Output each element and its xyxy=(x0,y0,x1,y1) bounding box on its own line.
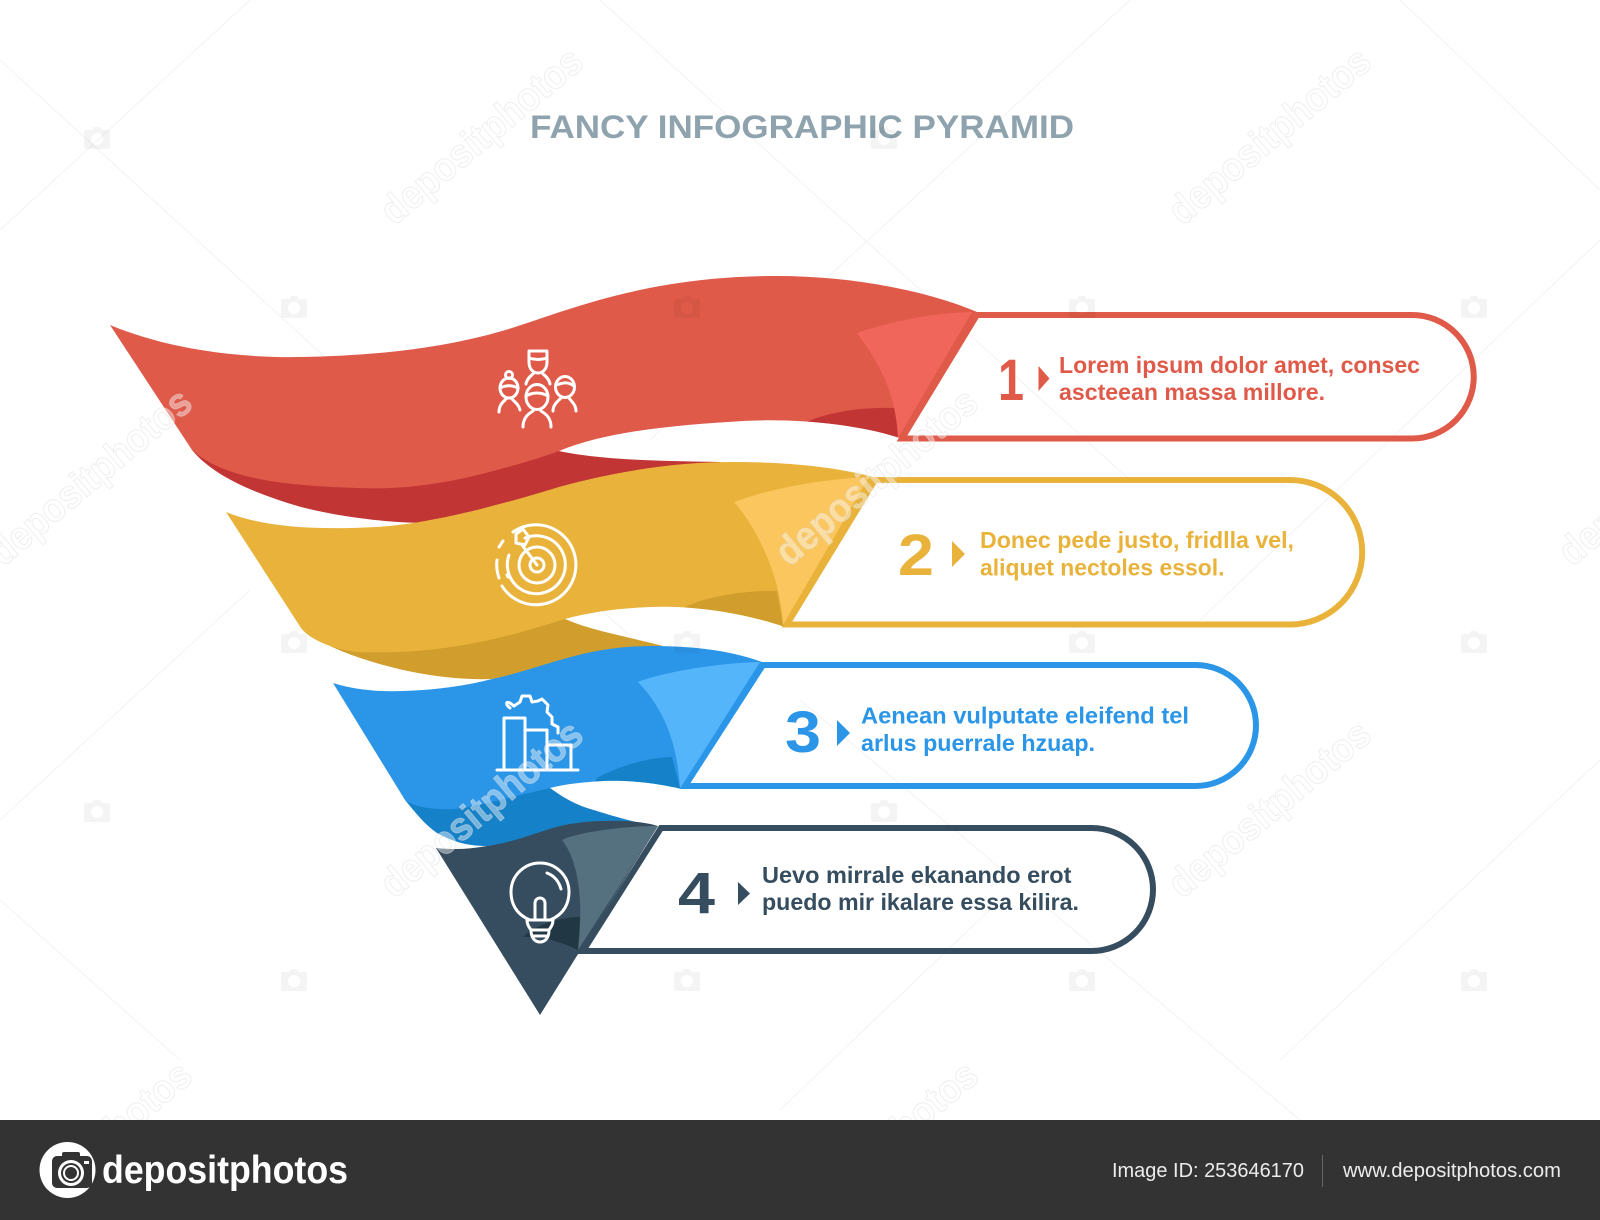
ribbon: blue xyxy=(333,646,762,809)
ribbon fold shadow: navy xyxy=(523,917,580,950)
ribbon shadow: yellow underside xyxy=(301,619,663,679)
text 1 xyxy=(1059,352,1420,405)
text 4 xyxy=(762,862,1079,915)
ribbon fold: yellow xyxy=(734,477,869,625)
ribbon fold shadow: yellow xyxy=(685,591,783,626)
ribbon fold shadow: blue xyxy=(595,757,680,788)
footer logo icon xyxy=(40,1142,96,1198)
footer url: www.depositphotos.com xyxy=(1342,1160,1561,1182)
panel: level 3 blue xyxy=(333,646,1256,846)
text 1: Lorem ipsum dolor amet, consec xyxy=(1059,352,1420,378)
panel: level 2 yellow xyxy=(226,462,1362,679)
title: FANCY INFOGRAPHIC PYRAMID xyxy=(530,109,1074,145)
ribbon shadow: blue underside xyxy=(405,788,658,846)
icon: target xyxy=(497,525,576,605)
arrow 4 xyxy=(738,882,750,905)
text box 2 xyxy=(787,480,1362,624)
ribbon: red xyxy=(110,276,977,488)
footer bar xyxy=(0,1120,1600,1220)
watermarks: depositphotos xyxy=(372,712,592,906)
ribbon: navy triangle xyxy=(436,821,658,1015)
number 3: 3 xyxy=(785,700,821,765)
ribbon fold shadow: red xyxy=(807,408,899,438)
ribbon fold: navy xyxy=(562,826,658,950)
number 2: 2 xyxy=(898,523,934,588)
icon: people xyxy=(499,351,576,427)
text 2: Donec pede justo, fridlla vel, xyxy=(980,527,1294,553)
ribbon: yellow xyxy=(226,462,874,652)
text 3 xyxy=(861,702,1189,756)
icon: light bulb xyxy=(511,863,569,942)
ribbon fold: red xyxy=(857,312,972,438)
ribbon shadow: red underside xyxy=(192,440,720,523)
text 2: aliquet nectoles essol. xyxy=(980,554,1224,580)
panel: level 4 navy xyxy=(436,821,1153,1015)
text 3: Aenean vulputate eleifend tel xyxy=(861,702,1189,728)
text 2 xyxy=(980,527,1294,580)
icon: factory chart xyxy=(497,696,578,770)
text box 1 xyxy=(902,315,1474,438)
watermarks: depositphotos xyxy=(1160,712,1380,906)
footer logo text: depositphotos xyxy=(102,1149,348,1192)
text 1: ascteean massa millore. xyxy=(1059,379,1325,405)
number 1: 1 xyxy=(998,348,1024,413)
text 4: Uevo mirrale ekanando erot xyxy=(762,862,1072,888)
number 4: 4 xyxy=(678,861,715,926)
text box 3 xyxy=(685,665,1256,786)
arrow 1 xyxy=(1038,366,1050,391)
text box 4 xyxy=(583,828,1153,951)
panel: level 1 red xyxy=(110,276,1474,523)
footer image id: Image ID: 253646170 xyxy=(1112,1160,1304,1182)
arrow 3 xyxy=(837,720,850,746)
arrow 2 xyxy=(952,541,965,567)
watermarks: depositphotos xyxy=(767,380,987,574)
text 4: puedo mir ikalare essa kilira. xyxy=(762,889,1079,915)
watermarks: depositphotos xyxy=(1160,39,1380,233)
text 3: arlus puerrale hzuap. xyxy=(861,730,1095,756)
watermarks: depositphotos xyxy=(372,39,592,233)
ribbon fold: blue xyxy=(638,662,760,789)
